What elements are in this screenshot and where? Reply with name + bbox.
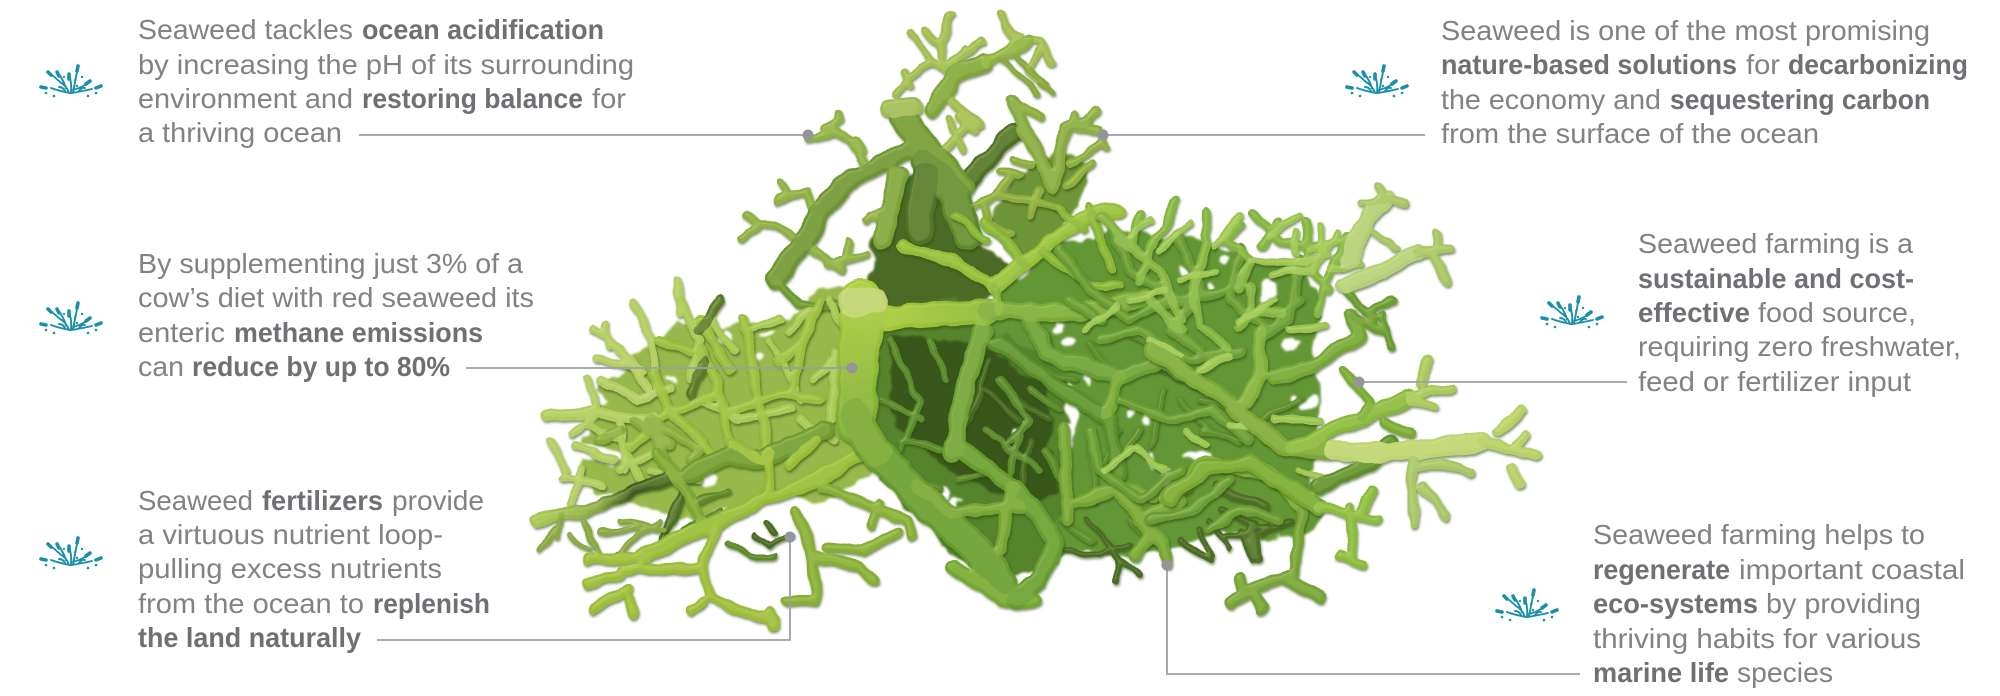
text block: coastal eco-systems: regenerate <box>1593 554 1730 585</box>
text block: decarbonizing: the economy and <box>1441 84 1661 115</box>
text block: decarbonizing: sequestering carbon <box>1670 84 1930 115</box>
text block: ocean acidification: a thriving ocean <box>138 117 342 148</box>
icon: seaweed sprig 2 <box>41 303 101 334</box>
text block: methane emissions: enteric <box>138 317 225 348</box>
text block: decarbonizing: for <box>1746 49 1780 80</box>
lower left branches <box>537 430 912 625</box>
text block: decarbonizing: decarbonizing <box>1788 49 1968 80</box>
text block: fertilizers: Seaweed <box>138 485 253 516</box>
leader line: methane emissions <box>466 362 858 374</box>
text block: sustainable food source: requiring zero freshwater, <box>1638 331 1961 362</box>
text block: ocean acidification: environment and <box>138 83 353 114</box>
text block: coastal eco-systems: eco-systems <box>1593 588 1758 619</box>
shadowed back fronds <box>663 133 1300 580</box>
icon: seaweed sprig 3 <box>41 538 101 569</box>
seaweed body masses and gaps <box>576 132 1344 590</box>
leader line: coastal eco-systems <box>1162 560 1580 674</box>
leader line: ocean acidification <box>359 130 814 140</box>
text block: methane emissions: By supplementing just 3% of a <box>138 248 524 279</box>
leader line: fertilizers <box>377 532 796 640</box>
text block: ocean acidification: Seaweed tackles <box>138 14 353 45</box>
text block: ocean acidification: ocean acidification <box>362 14 604 45</box>
text block: decarbonizing: nature-based solutions <box>1441 49 1737 80</box>
text block: methane emissions: cow’s diet with red seaweed its <box>138 282 534 313</box>
text block: sustainable food source: effective <box>1638 297 1750 328</box>
text block: decarbonizing: from the surface of the ocean <box>1441 118 1819 149</box>
icon: seaweed sprig 5 <box>1542 297 1602 328</box>
top cluster fronds <box>740 13 1107 305</box>
text block: coastal eco-systems: important coastal <box>1739 554 1965 585</box>
text block: ocean acidification <box>138 14 634 148</box>
text block: sustainable food source: food source, <box>1758 297 1916 328</box>
text block: coastal eco-systems: thriving habits for various <box>1593 623 1921 654</box>
seaweed illustration <box>537 13 1537 625</box>
text block: fertilizers: a virtuous nutrient loop- <box>138 519 443 550</box>
central bright stem and bar <box>853 205 1320 608</box>
text block: sustainable food source <box>1638 228 1961 397</box>
icon: seaweed sprig 4 <box>1347 66 1407 97</box>
text block: methane emissions: methane emissions <box>234 317 483 348</box>
text block: coastal eco-systems: Seaweed farming helps to <box>1593 519 1925 550</box>
text block: methane emissions: reduce by up to 80% <box>192 351 450 382</box>
text block: decarbonizing: Seaweed is one of the most promising <box>1441 15 1930 46</box>
text block: methane emissions <box>138 248 534 382</box>
text block: fertilizers: fertilizers <box>262 485 383 516</box>
text block: sustainable food source: Seaweed farming is a <box>1638 228 1914 259</box>
icon: seaweed sprig 6 <box>1497 590 1557 621</box>
left lobe fronds <box>547 280 850 505</box>
text block: fertilizers: from the ocean to <box>138 588 364 619</box>
text block: coastal eco-systems <box>1593 519 1965 688</box>
text block: coastal eco-systems: marine life <box>1593 657 1729 688</box>
text block: ocean acidification: by increasing the pH of its surrounding <box>138 49 634 80</box>
text block: coastal eco-systems: by providing <box>1766 588 1921 619</box>
text block: fertilizers: replenish <box>373 588 490 619</box>
text block: ocean acidification: restoring balance <box>362 83 583 114</box>
text block: fertilizers: pulling excess nutrients <box>138 553 442 584</box>
leader line: decarbonizing <box>1098 130 1425 140</box>
right lobe fronds <box>1060 185 1537 565</box>
text block: methane emissions: can <box>138 351 184 382</box>
text block: decarbonizing <box>1441 15 1968 149</box>
text block: fertilizers: the land naturally <box>138 622 362 653</box>
icon: seaweed sprig 1 <box>41 66 101 97</box>
text block: coastal eco-systems: species <box>1737 657 1833 688</box>
text block: sustainable food source: sustainable and cost- <box>1638 263 1914 294</box>
leader line: sustainable food <box>1354 376 1627 388</box>
text block: fertilizers <box>138 485 490 653</box>
text block: ocean acidification: for <box>592 83 626 114</box>
text block: fertilizers: provide <box>392 485 484 516</box>
text block: sustainable food source: feed or fertilizer input <box>1638 366 1911 397</box>
